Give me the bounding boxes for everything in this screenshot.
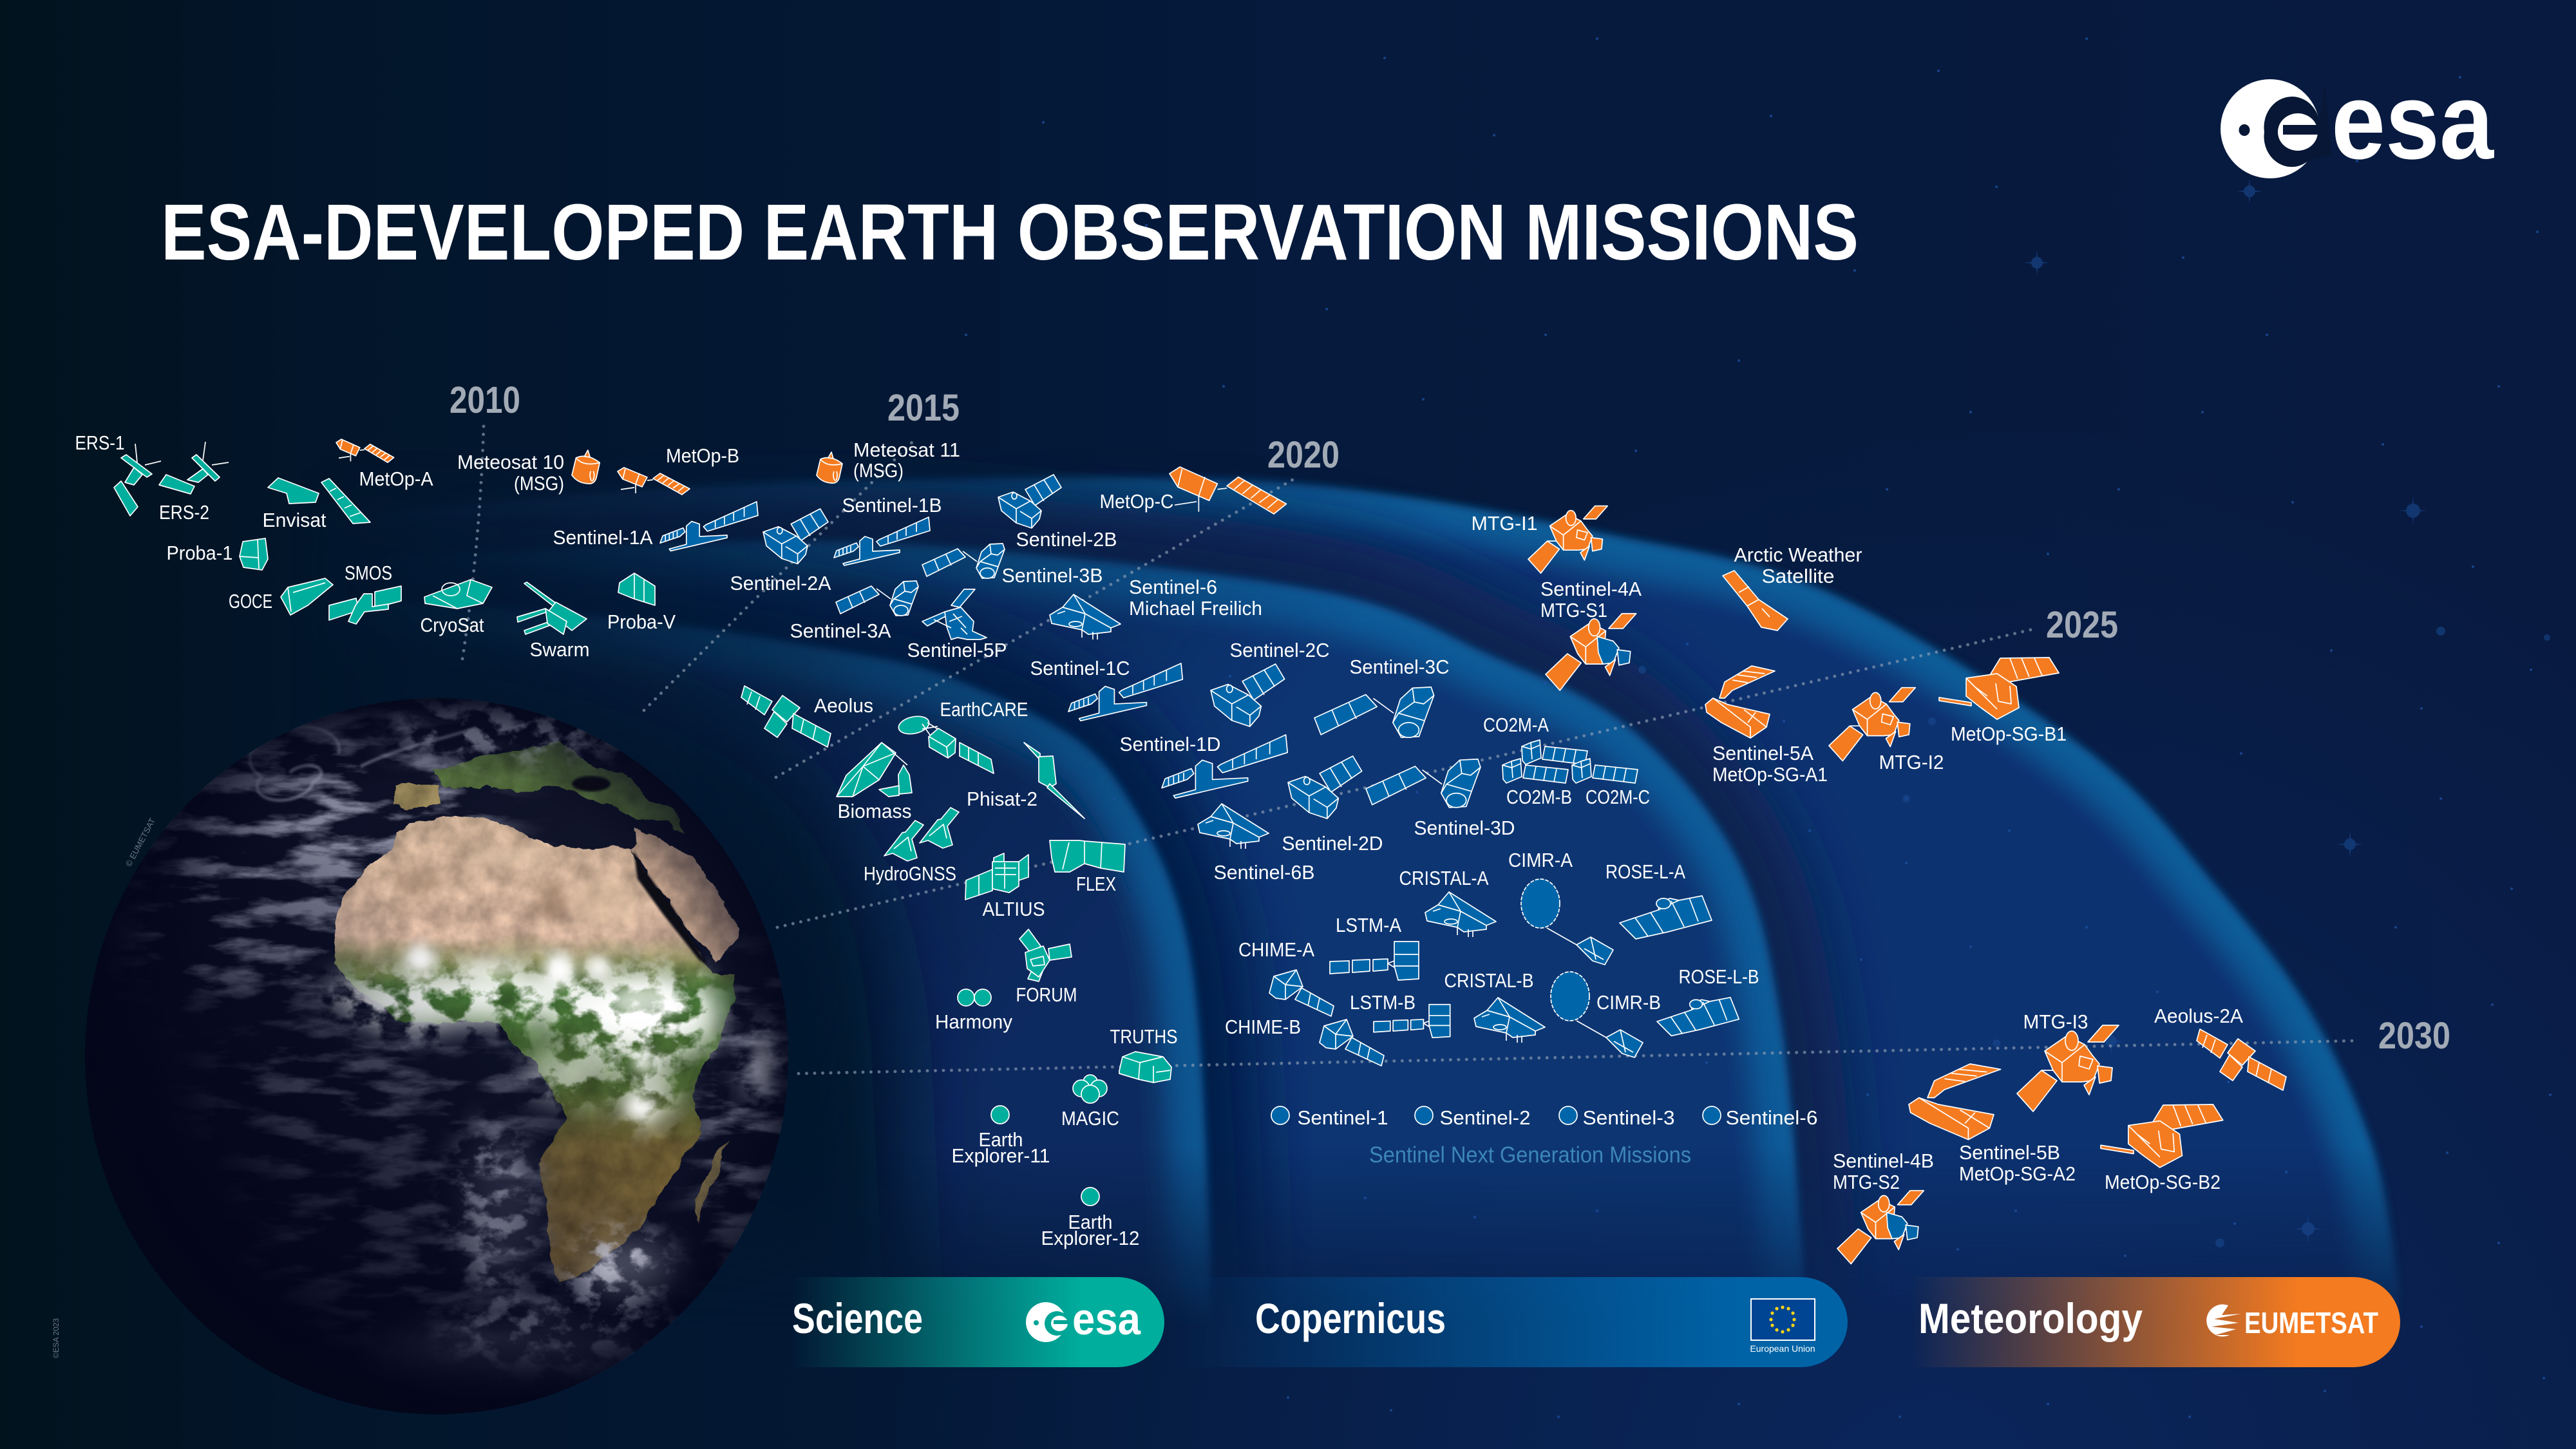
- MetOp-SG-B1: [1939, 658, 2067, 745]
- Sentinel-6 Michael Freilich: Michael Freilich: [1129, 597, 1262, 620]
- timeline 2025: [777, 629, 2033, 927]
- CO2M-A: CO2M-A: [1483, 714, 1549, 736]
- year 2010: 2010: [450, 379, 520, 421]
- legend: Sentinel-3: Sentinel-3: [1583, 1106, 1674, 1129]
- logo: EUMETSAT: EUMETSAT: [2244, 1306, 2378, 1340]
- desert shading: [393, 848, 638, 927]
- CO2M-B: [1502, 759, 1572, 808]
- pill: Meteorology: Meteorology: [1918, 1294, 2143, 1342]
- pill: Science: [790, 1277, 1164, 1367]
- GOCE: GOCE: [229, 590, 272, 612]
- Sentinel-1D: Sentinel-1D: [1119, 733, 1221, 755]
- star glints: [2024, 178, 2427, 1243]
- Harmony: [935, 989, 1012, 1033]
- Swarm: Swarm: [529, 638, 590, 661]
- Sentinel-1C: Sentinel-1C: [1030, 657, 1130, 679]
- legend: Sentinel-2: Sentinel-2: [1440, 1106, 1530, 1129]
- ESA logo: esa: [2331, 61, 2494, 182]
- Arctic Weather Satellite: Satellite: [1762, 565, 1834, 587]
- star field: [927, 39, 2550, 1417]
- Sentinel-4B MTG-S2: MTG-S2: [1833, 1171, 1900, 1193]
- CHIME-A: CHIME-A: [1238, 938, 1314, 961]
- LSTM-A: [1330, 914, 1419, 980]
- Madagascar: [695, 1141, 733, 1219]
- Phisat-2: [967, 743, 1084, 819]
- CO2M-C: CO2M-C: [1586, 786, 1650, 808]
- LSTM-A: LSTM-A: [1336, 914, 1401, 936]
- TRUTHS: TRUTHS: [1110, 1025, 1177, 1048]
- FLEX: [1050, 840, 1125, 895]
- pill: Copernicus: [1176, 1277, 1848, 1367]
- satellites: meteorology (orange): [336, 439, 2286, 1264]
- Sentinel-2A: Sentinel-2A: [730, 572, 831, 594]
- year 2025: 2025: [2046, 604, 2118, 646]
- ESA logo: [2221, 61, 2494, 182]
- CRISTAL-B: CRISTAL-B: [1444, 969, 1534, 992]
- Sentinel-4A MTG-S1: MTG-S1: [1540, 599, 1607, 621]
- Aeolus: [741, 686, 873, 747]
- Sentinel-2A: [730, 509, 831, 594]
- ERS-1: ERS-1: [75, 431, 125, 454]
- pill: Copernicus: Copernicus: [1255, 1294, 1446, 1342]
- MetOp-C: MetOp-C: [1100, 490, 1173, 513]
- pill: Meteorology: [1909, 1277, 2400, 1367]
- MetOp-SG-B2: [2101, 1104, 2223, 1193]
- LSTM-B: LSTM-B: [1350, 991, 1416, 1014]
- Sentinel-3A: [790, 581, 918, 642]
- MetOp-C: [1100, 467, 1286, 514]
- MTG-I1: [1471, 506, 1607, 573]
- logo: ESA small: [1026, 1294, 1141, 1344]
- Sentinel-3A: Sentinel-3A: [790, 620, 891, 642]
- Earth Explorer-12: Explorer-12: [1041, 1227, 1140, 1249]
- HydroGNSS: [864, 808, 959, 885]
- ERS-2: [159, 442, 229, 524]
- logo: European Union flag: European Union: [1750, 1343, 1815, 1354]
- MAGIC: [1061, 1075, 1119, 1130]
- Red Sea: [634, 850, 708, 966]
- CRISTAL-A: CRISTAL-A: [1399, 867, 1489, 889]
- Proba-V: [607, 573, 676, 633]
- satellites: science and early missions (teal): [75, 431, 1177, 1249]
- year 2020: 2020: [1267, 434, 1340, 476]
- logo: EUMETSAT: [2206, 1304, 2378, 1340]
- ROSE-L-A: [1605, 860, 1712, 939]
- Sentinel-3C: Sentinel-3C: [1350, 656, 1449, 678]
- ROSE-L-A: ROSE-L-A: [1605, 860, 1685, 883]
- Sentinel-2C: Sentinel-2C: [1230, 639, 1329, 661]
- Sentinel-2B: [998, 475, 1117, 551]
- MetOp-B: [618, 444, 739, 495]
- SMOS: [329, 562, 401, 624]
- Sentinel-3C: [1314, 656, 1449, 737]
- Sentinel-5A MetOp-SG-A1: [1705, 666, 1828, 786]
- CO2M-C: [1572, 759, 1650, 808]
- Aeolus-2A: [2154, 1005, 2286, 1090]
- Meteosat 10: Meteosat 10: [457, 451, 564, 473]
- ERS-2: ERS-2: [159, 501, 209, 524]
- Sentinel-5P: [907, 589, 1007, 661]
- Sentinel-3D: Sentinel-3D: [1414, 817, 1515, 839]
- MetOp-A: MetOp-A: [359, 468, 433, 490]
- Sentinel-1C: [1030, 657, 1182, 721]
- Sentinel-5P: Sentinel-5P: [907, 639, 1007, 661]
- ERS-1: [75, 431, 161, 516]
- CIMR-B: CIMR-B: [1596, 991, 1661, 1014]
- CHIME-B: CHIME-B: [1225, 1016, 1301, 1038]
- Earth Explorer-12: Earth: [1068, 1211, 1113, 1233]
- CIMR-A: CIMR-A: [1508, 849, 1573, 871]
- legend: Sentinel-6: Sentinel-6: [1726, 1106, 1817, 1129]
- Proba-1: Proba-1: [166, 542, 233, 564]
- timeline year markers and dotted lines: [450, 379, 2450, 1074]
- year 2015: 2015: [887, 387, 960, 429]
- Phisat-2: Phisat-2: [967, 788, 1037, 810]
- Meteosat 10: [457, 450, 600, 495]
- Biomass: [837, 743, 912, 822]
- FORUM: FORUM: [1016, 983, 1077, 1006]
- Sentinel-2C: [1211, 639, 1329, 726]
- MTG-I2: [1829, 688, 1944, 773]
- Envisat: [263, 478, 370, 531]
- CryoSat: [420, 580, 492, 636]
- Aeolus: Aeolus: [814, 694, 873, 717]
- Sentinel-2B: Sentinel-2B: [1016, 528, 1117, 551]
- Earth globe: [77, 696, 799, 1423]
- Sentinel-4A MTG-S1: [1540, 578, 1642, 690]
- timeline 2015: [644, 438, 916, 710]
- logo: European Union flag: [1750, 1299, 1815, 1354]
- Sentinel-1A: [553, 502, 758, 551]
- Sentinel-1A: Sentinel-1A: [553, 526, 653, 549]
- GOCE: [229, 578, 333, 615]
- Meteosat 11: Meteosat 11: [853, 439, 960, 461]
- Sentinel-4A MTG-S1: Sentinel-4A: [1540, 578, 1642, 600]
- Sentinel-5B MetOp-SG-A2: Sentinel-5B: [1959, 1141, 2060, 1164]
- timeline 2020: [776, 477, 1297, 777]
- CO2M-B: CO2M-B: [1506, 786, 1572, 808]
- pill: Science: Science: [792, 1294, 923, 1342]
- Meteosat 10: (MSG): [514, 472, 564, 495]
- Aeolus-2A: Aeolus-2A: [2154, 1005, 2243, 1027]
- cyclone swirl: [250, 727, 477, 800]
- Sentinel-6 Michael Freilich: [1050, 576, 1262, 639]
- CIMR-B: [1551, 972, 1661, 1057]
- orbit arcs: [431, 473, 2398, 1306]
- legend caption: Sentinel Next Generation Missions: [1369, 1142, 1691, 1168]
- TRUTHS: [1110, 1025, 1177, 1083]
- EarthCARE: EarthCARE: [940, 698, 1028, 721]
- CIMR-A: [1508, 849, 1613, 965]
- Sentinel-3D: [1366, 759, 1515, 839]
- Sentinel-5A MetOp-SG-A1: MetOp-SG-A1: [1712, 763, 1828, 786]
- FORUM: [1016, 929, 1077, 1006]
- CO2M-A: [1483, 714, 1587, 764]
- legend: Sentinel-1: Sentinel-1: [1297, 1106, 1388, 1129]
- FLEX: FLEX: [1076, 873, 1116, 895]
- Earth Explorer-11: [952, 1106, 1050, 1167]
- MAGIC: MAGIC: [1061, 1107, 1119, 1130]
- LSTM-B: [1350, 991, 1450, 1037]
- cloud bands: [77, 696, 799, 1423]
- Sentinel-4B MTG-S2: Sentinel-4B: [1833, 1150, 1934, 1172]
- HydroGNSS: HydroGNSS: [864, 862, 956, 885]
- Sentinel-6 Michael Freilich: Sentinel-6: [1129, 576, 1217, 598]
- Proba-V: Proba-V: [607, 611, 676, 633]
- satellites: Copernicus (blue): [553, 475, 1817, 1168]
- Black Sea: [572, 776, 611, 791]
- Sentinel-5B MetOp-SG-A2: MetOp-SG-A2: [1959, 1162, 2076, 1185]
- ROSE-L-B: ROSE-L-B: [1678, 965, 1759, 988]
- MetOp-B: MetOp-B: [666, 444, 739, 467]
- Sentinel-3B: Sentinel-3B: [1002, 564, 1103, 587]
- MetOp-SG-B1: MetOp-SG-B1: [1951, 723, 2067, 745]
- ALTIUS: ALTIUS: [983, 898, 1045, 920]
- ocean clouds: [128, 711, 788, 1336]
- timeline 2010: [462, 426, 484, 663]
- Europe: [433, 741, 689, 831]
- MTG-I2: MTG-I2: [1879, 751, 1944, 773]
- year 2030: 2030: [2378, 1015, 2450, 1057]
- southern clouds: [77, 696, 799, 1423]
- Meteosat 11: (MSG): [853, 459, 904, 482]
- Envisat: Envisat: [263, 509, 327, 531]
- Sentinel-6B: [1198, 804, 1315, 884]
- Sentinel-1D: [1119, 733, 1287, 798]
- Sentinel-1B: [834, 494, 942, 565]
- MetOp-SG-B2: MetOp-SG-B2: [2105, 1171, 2221, 1193]
- Africa: [334, 812, 740, 1282]
- Sentinel-1B: Sentinel-1B: [842, 494, 942, 516]
- MTG-I3: MTG-I3: [2023, 1010, 2088, 1033]
- Sentinel-5A MetOp-SG-A1: Sentinel-5A: [1712, 742, 1814, 764]
- image credit: EUMETSAT: © EUMETSAT: [124, 817, 157, 868]
- Sentinel-6B: Sentinel-6B: [1213, 861, 1315, 884]
- EarthCARE: [897, 698, 1028, 773]
- MTG-I1: MTG-I1: [1471, 512, 1538, 535]
- CRISTAL-A: [1399, 867, 1496, 937]
- land masses: [334, 741, 740, 1282]
- title: ESA-DEVELOPED EARTH OBSERVATION MISSIONS: [161, 189, 1859, 277]
- CHIME-B: [1225, 1016, 1384, 1066]
- Harmony: Harmony: [935, 1010, 1012, 1033]
- Sentinel-3B: [922, 544, 1103, 587]
- Arctic Weather Satellite: Arctic Weather: [1734, 544, 1862, 566]
- logo: ESA small: esa: [1072, 1294, 1141, 1344]
- Earth Explorer-11: Earth: [979, 1128, 1023, 1151]
- ROSE-L-B: [1657, 965, 1759, 1036]
- MTG-I3: [2017, 1010, 2119, 1112]
- image credit: ESA: ©ESA 2023: [52, 1318, 61, 1358]
- legend pills: [790, 1277, 2400, 1367]
- Proba-1: [166, 538, 268, 570]
- Arctic Weather Satellite: [1723, 544, 1862, 630]
- timeline 2030: [799, 1041, 2358, 1074]
- Sentinel-4B MTG-S2: [1833, 1150, 1934, 1264]
- Swarm: [517, 582, 590, 661]
- CryoSat: CryoSat: [420, 614, 484, 636]
- Sentinel-5B MetOp-SG-A2: [1909, 1064, 2076, 1185]
- CHIME-A: [1238, 938, 1334, 1016]
- Earth Explorer-11: Explorer-11: [952, 1144, 1050, 1167]
- SMOS: SMOS: [345, 562, 392, 584]
- Meteosat 11: [817, 439, 960, 483]
- Earth Explorer-12: [1041, 1188, 1140, 1249]
- Arabia: [634, 826, 740, 962]
- Biomass: Biomass: [837, 800, 912, 822]
- ALTIUS: [965, 853, 1045, 920]
- shading: [85, 698, 788, 1414]
- Sentinel-2D: [1282, 756, 1383, 855]
- MetOp-A: [336, 439, 433, 490]
- Sentinel-2D: Sentinel-2D: [1282, 832, 1383, 855]
- CRISTAL-B: [1444, 969, 1545, 1043]
